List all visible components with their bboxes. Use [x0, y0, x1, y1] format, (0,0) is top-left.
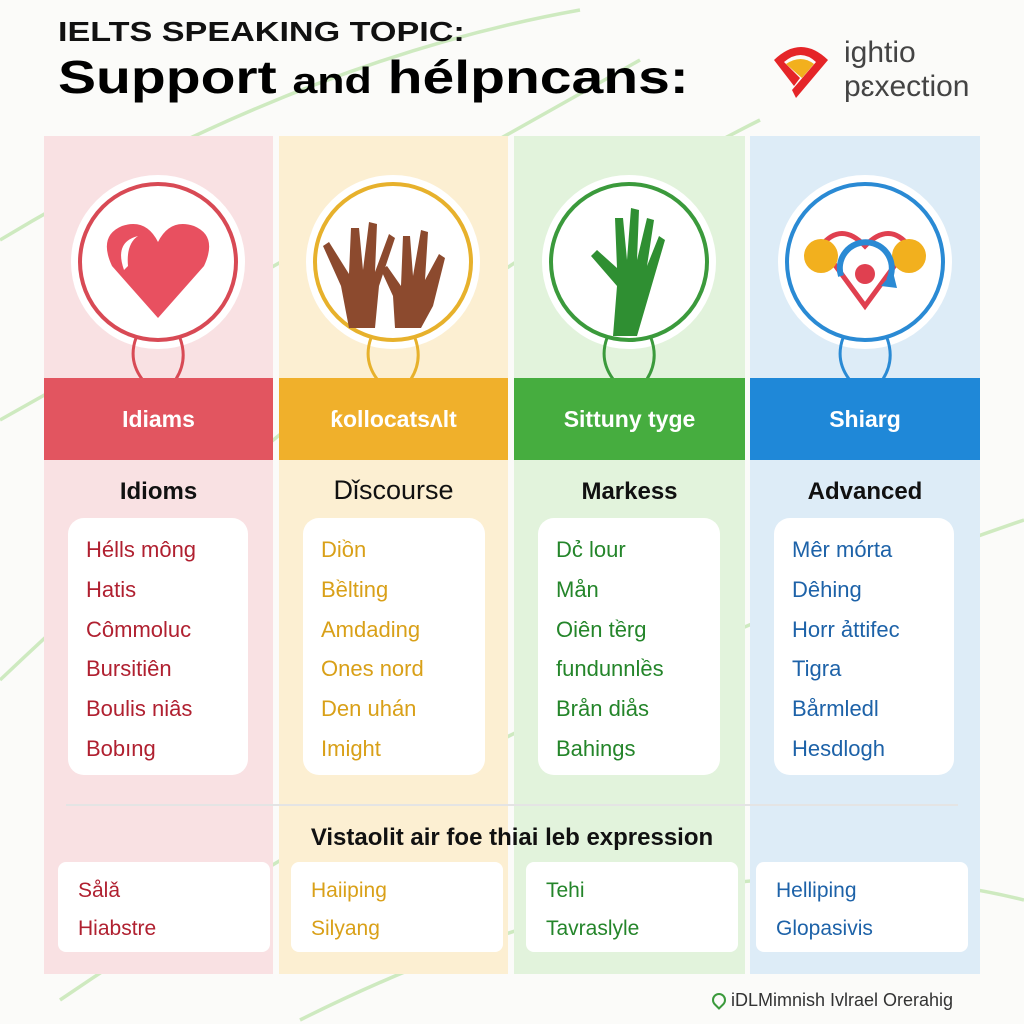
word lists	[68, 518, 954, 775]
title	[58, 16, 689, 103]
word lists: Imight	[321, 736, 381, 761]
logo: ightio	[844, 36, 916, 69]
word lists: Den uhán	[321, 696, 416, 721]
bottom heading: Vistaolit air foe thiai leb expression	[311, 824, 713, 851]
word lists: Boulis niâs	[86, 696, 192, 721]
subheadings: Idioms	[120, 478, 197, 505]
header bars: Shiarg	[829, 406, 901, 432]
bottom expression boxes: Haiiping	[311, 879, 387, 902]
word lists: Hatis	[86, 577, 136, 602]
bottom expression boxes: Hiabstre	[78, 917, 156, 940]
header bars	[44, 378, 980, 460]
word lists: Hélls mông	[86, 537, 196, 562]
word lists: Diồn	[321, 537, 366, 562]
icon: sharing heads	[778, 175, 952, 378]
bottom expression boxes: Tavraslyle	[546, 917, 639, 940]
word lists: Amdading	[321, 617, 420, 642]
subheadings: Advanced	[808, 478, 922, 505]
word lists: Hesdlogh	[792, 736, 885, 761]
word lists: Bềlting	[321, 577, 388, 602]
bottom expression boxes: Sålǎ	[78, 879, 120, 902]
bottom expression boxes: Silyang	[311, 917, 380, 940]
word lists: Bårmledl	[792, 696, 879, 721]
header bars: ƙollocatsʌlt	[330, 406, 457, 432]
logo: pɛxection	[844, 70, 970, 103]
word lists: Tigra	[792, 656, 841, 681]
bottom expression boxes: Glopasivis	[776, 917, 873, 940]
icon: heart	[71, 175, 245, 378]
word lists: Horr ảttifec	[792, 617, 900, 642]
word lists: Bahings	[556, 736, 636, 761]
header bars: Sittuny tyge	[564, 406, 695, 432]
word lists: Bursitiên	[86, 656, 172, 681]
subheadings: Markess	[581, 478, 678, 505]
word lists: Cômmoluc	[86, 617, 191, 642]
title: IELTS SPEAKING TOPIC:	[58, 16, 465, 47]
subheadings: Dǐscourse	[333, 475, 454, 505]
word lists: Bobıng	[86, 736, 156, 761]
word lists: Oiên tềrg	[556, 617, 646, 642]
bottom expression boxes: Helliping	[776, 879, 857, 902]
title: Support and hélpncans:	[58, 51, 689, 103]
word lists: Dc̉ lour	[556, 537, 626, 562]
subheadings	[120, 475, 922, 505]
word lists: Mån	[556, 577, 599, 602]
bottom expression boxes	[58, 862, 968, 952]
header bars: Idiams	[122, 406, 195, 432]
word lists: Mêr mórta	[792, 537, 892, 562]
word lists: Dêhing	[792, 577, 862, 602]
icon: green hand	[542, 175, 716, 378]
footer: iDLMimnish Ivlrael Orerahig	[731, 990, 953, 1010]
icon: hands	[306, 175, 480, 378]
word lists: fundunnlềs	[556, 656, 664, 681]
logo	[774, 36, 970, 103]
bottom expression boxes: Tehi	[546, 879, 585, 902]
word lists: Ones nord	[321, 656, 424, 681]
word lists: Brån diås	[556, 696, 649, 721]
divider	[66, 804, 958, 806]
